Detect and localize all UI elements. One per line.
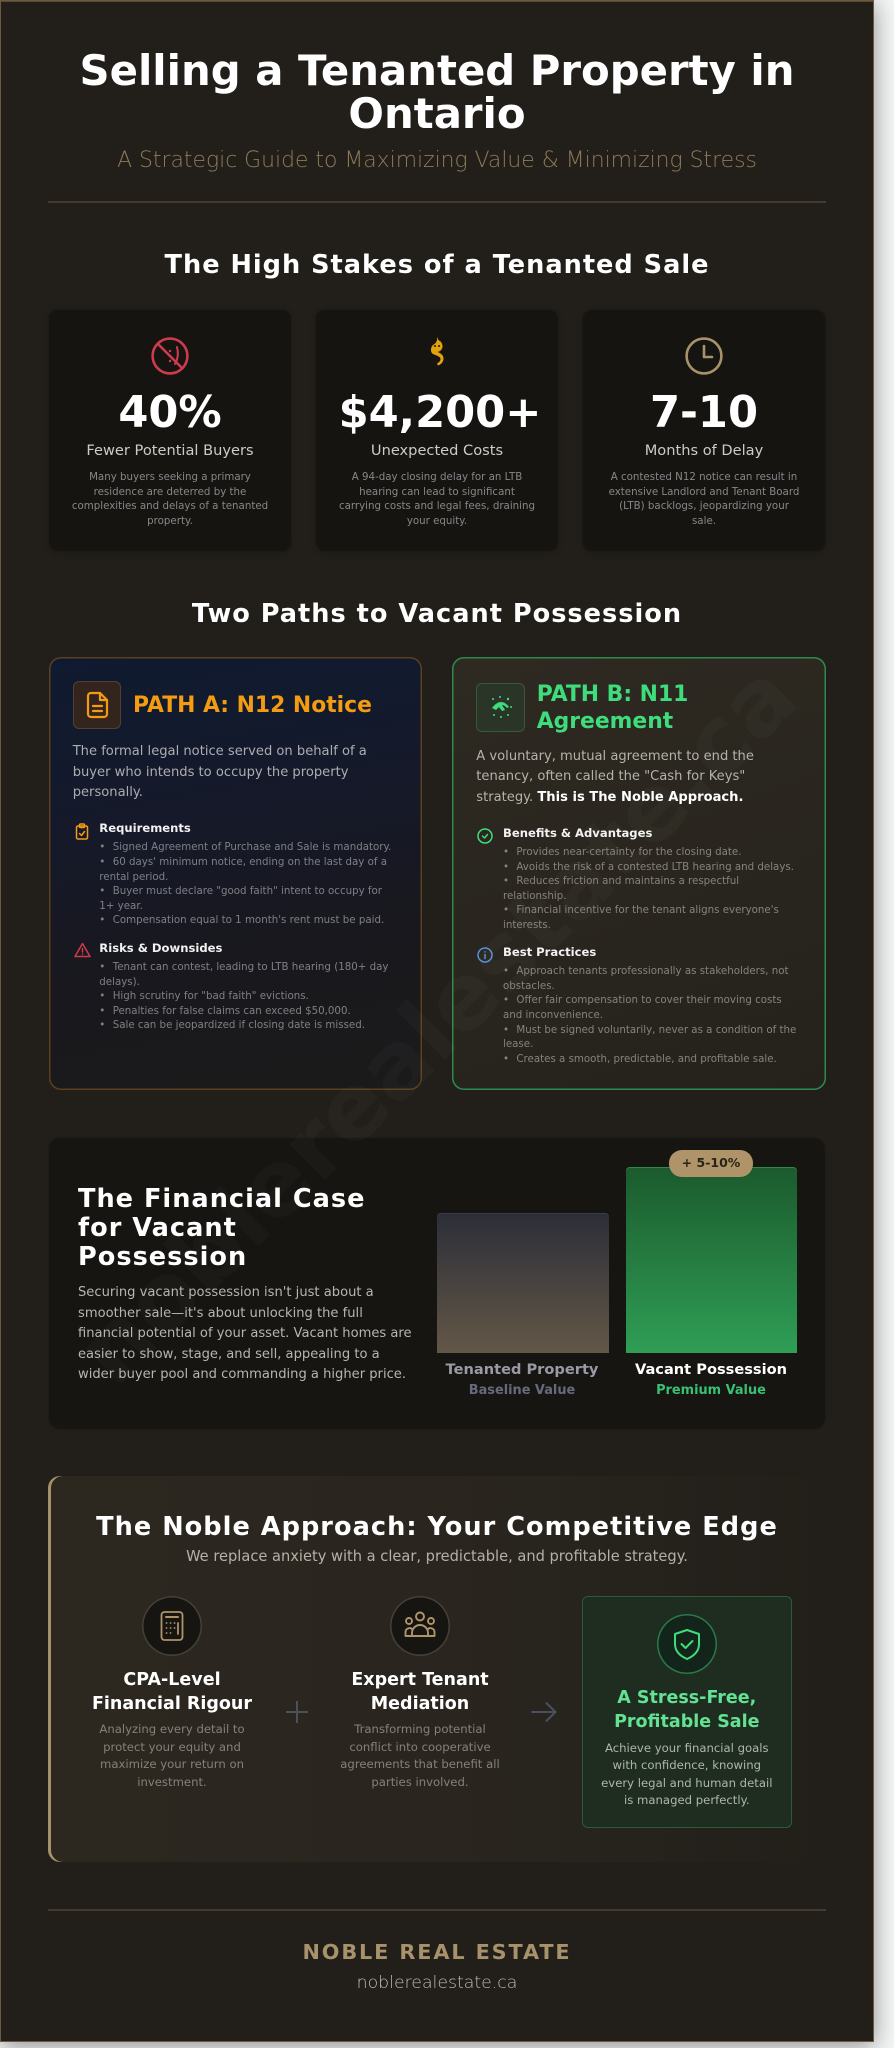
benefits list: relationship.: [503, 890, 567, 902]
stat description: carrying costs and legal fees, draining: [339, 500, 535, 512]
stat description: [72, 471, 268, 527]
noble heading: The Noble Approach: Your Competitive Edge: [96, 1512, 778, 1542]
noble subheading: We replace anxiety with a clear, predictable, and profitable strategy.: [186, 1548, 688, 1565]
financial heading: The Financial Case: [78, 1184, 365, 1214]
best practices list: Approach tenants professionally as stakeholders, not: [516, 965, 789, 977]
stat description: sale.: [692, 515, 716, 527]
best practices list: and inconvenience.: [503, 1009, 603, 1021]
risks list: delays).: [99, 976, 140, 988]
risks list: Sale can be jeopardized if closing date is missed.: [113, 1019, 365, 1031]
path A description: [72, 744, 367, 800]
financial heading: Possession: [78, 1242, 247, 1272]
requirements heading: Requirements: [99, 821, 191, 835]
benefits list: •: [503, 846, 509, 858]
column title: Expert Tenant: [351, 1670, 489, 1690]
stat description: [339, 471, 535, 527]
best practices list: •: [503, 1024, 509, 1036]
column description: [340, 1722, 500, 1789]
stat description: [609, 471, 799, 527]
benefits list: [503, 846, 794, 931]
stat description: extensive Landlord and Tenant Board: [609, 486, 799, 498]
stat label: Months of Delay: [645, 442, 763, 459]
icon: calculator: [142, 1596, 202, 1656]
callout description: [601, 1741, 772, 1807]
financial description: smoother sale—it's about unlocking the full: [78, 1306, 363, 1321]
requirements list: [99, 841, 391, 926]
callout description: every legal and human detail: [601, 1776, 772, 1790]
icon: info circle: [477, 947, 493, 963]
requirements list: 1+ year.: [99, 900, 143, 912]
path B description: A voluntary, mutual agreement to end the: [476, 748, 754, 764]
risks list: High scrutiny for "bad faith" evictions.: [113, 990, 309, 1002]
best practices list: •: [503, 965, 509, 977]
financial description: [78, 1285, 412, 1382]
column description: Analyzing every detail to: [99, 1722, 245, 1736]
title: Selling a Tenanted Property in: [80, 46, 794, 95]
best practices list: •: [503, 1053, 509, 1065]
best practices list: Must be signed voluntarily, never as a condition of the: [516, 1024, 796, 1036]
icon: people: [390, 1596, 450, 1656]
stat label: Unexpected Costs: [371, 442, 503, 459]
heading: two paths: Two Paths to Vacant Possession: [192, 599, 682, 629]
panel: stat fewer buyers: [48, 309, 292, 552]
column description: conflict into cooperative: [349, 1740, 491, 1754]
callout description: Achieve your financial goals: [605, 1741, 769, 1755]
column title: Financial Rigour: [92, 1694, 252, 1714]
financial description: financial potential of your asset. Vacant homes are: [78, 1326, 412, 1341]
financial description: wider buyer pool and commanding a higher price.: [78, 1367, 406, 1382]
title: Ontario: [348, 89, 526, 138]
icon: document: [73, 681, 121, 729]
path A title: PATH A: N12 Notice: [133, 693, 372, 718]
footer website: noblerealestate.ca: [357, 1973, 517, 1993]
path B description: tenancy, often called the "Cash for Keys": [476, 769, 745, 784]
column description: [99, 1722, 245, 1789]
path B title: Agreement: [537, 709, 673, 734]
best practices list: obstacles.: [503, 980, 555, 992]
stat value: 40%: [118, 388, 222, 438]
risks list: •: [99, 961, 105, 973]
icon: plus: [286, 1701, 308, 1723]
stat description: A 94-day closing delay for an LTB: [352, 471, 522, 483]
column description: agreements that benefit all: [340, 1757, 500, 1771]
column title: Mediation: [371, 1694, 469, 1714]
best practices heading: Best Practices: [503, 945, 596, 959]
column title: [351, 1670, 489, 1714]
panel: path B: [452, 657, 826, 1090]
panel: path A: [48, 657, 422, 1090]
column: financial rigour: [92, 1596, 252, 1789]
stat value: 7-10: [650, 388, 758, 438]
stat description: your equity.: [407, 515, 467, 527]
benefits list: •: [503, 861, 509, 873]
column description: protect your equity and: [103, 1740, 241, 1754]
icon: clock: [685, 337, 723, 375]
requirements list: rental period.: [99, 871, 168, 883]
column description: maximize your return on: [100, 1757, 244, 1771]
panel: stat unexpected costs: [315, 309, 559, 552]
icon: check circle: [477, 828, 493, 844]
stat description: hearing can lead to significant: [359, 486, 515, 498]
stat value: $4,200+: [339, 388, 541, 438]
callout title: [614, 1688, 759, 1732]
callout description: with confidence, knowing: [613, 1758, 761, 1772]
value: premium: Premium Value: [656, 1382, 766, 1398]
requirements list: Signed Agreement of Purchase and Sale is mandatory.: [113, 841, 391, 853]
best practices list: Offer fair compensation to cover their moving costs: [516, 994, 782, 1006]
badge: premium: + 5-10%: [682, 1155, 740, 1170]
value: baseline: Baseline Value: [469, 1382, 575, 1398]
icon: shield: [657, 1614, 717, 1674]
icon: arrow: [532, 1702, 557, 1722]
icon: no buyers: [151, 337, 189, 375]
callout: stress-free sale: [582, 1596, 792, 1828]
panel: financial case: [48, 1137, 826, 1430]
stat description: property.: [147, 515, 193, 527]
column title: [92, 1670, 252, 1714]
icon: warning: [74, 942, 91, 958]
icon: dollar: [431, 337, 444, 366]
financial description: easier to show, stage, and sell, appealing to a: [78, 1347, 380, 1362]
stat description: Many buyers seeking a primary: [89, 471, 251, 483]
stat description: residence are deterred by the: [94, 486, 246, 498]
path B description: [476, 748, 754, 804]
best practices list: lease.: [503, 1038, 533, 1050]
benefits list: •: [503, 904, 509, 916]
path A description: buyer who intends to occupy the property: [73, 765, 348, 780]
footer brand: NOBLE REAL ESTATE: [302, 1940, 572, 1964]
watermark: noblerealestate.ca: [56, 643, 818, 1405]
benefits list: •: [503, 875, 509, 887]
financial description: Securing vacant possession isn't just about a: [78, 1285, 374, 1300]
stat description: A contested N12 notice can result in: [611, 471, 797, 483]
column description: Transforming potential: [354, 1722, 486, 1736]
stat description: complexities and delays of a tenanted: [72, 500, 268, 512]
label: tenanted: Tenanted Property: [446, 1361, 598, 1378]
path B title: PATH B: N11: [537, 682, 688, 707]
risks list: Penalties for false claims can exceed $50,000.: [113, 1005, 351, 1017]
requirements list: •: [99, 856, 105, 868]
requirements list: 60 days' minimum notice, ending on the last day of a: [113, 856, 387, 868]
path B description: strategy. This is The Noble Approach.: [476, 790, 743, 804]
column title: CPA-Level: [123, 1670, 221, 1690]
callout description: is managed perfectly.: [624, 1793, 750, 1807]
path A description: personally.: [73, 785, 143, 800]
risks list: •: [99, 990, 105, 1002]
risks list: •: [99, 1005, 105, 1017]
benefits list: Avoids the risk of a contested LTB hearing and delays.: [516, 861, 794, 873]
best practices list: [503, 965, 796, 1065]
requirements list: •: [99, 841, 105, 853]
badge: premium: [669, 1150, 753, 1177]
label: vacant: Vacant Possession: [635, 1361, 787, 1378]
heading: high stakes: The High Stakes of a Tenanted Sale: [165, 250, 709, 280]
requirements list: •: [99, 885, 105, 897]
icon: handshake: [476, 683, 525, 732]
financial heading: [78, 1184, 365, 1272]
subtitle: A Strategic Guide to Maximizing Value & Minimizing Stress: [117, 148, 757, 173]
icon: clipboard: [76, 823, 88, 840]
callout title: Profitable Sale: [614, 1712, 759, 1732]
risks list: Tenant can contest, leading to LTB hearing (180+ day: [113, 961, 388, 973]
title: [80, 46, 794, 138]
best practices list: Creates a smooth, predictable, and profitable sale.: [516, 1053, 777, 1065]
risks list: •: [99, 1019, 105, 1031]
path B title: [536, 682, 688, 734]
stat description: (LTB) backlogs, jeopardizing your: [619, 500, 789, 512]
panel: stat months of delay: [582, 309, 826, 552]
column: tenant mediation: [340, 1596, 500, 1789]
bar: tenanted: [437, 1213, 608, 1353]
column description: investment.: [137, 1775, 207, 1789]
best practices list: •: [503, 994, 509, 1006]
bar: vacant: [626, 1167, 797, 1353]
financial heading: for Vacant: [78, 1213, 237, 1243]
panel: noble approach: [48, 1476, 826, 1862]
benefits list: Reduces friction and maintains a respectful: [516, 875, 739, 887]
stat label: Fewer Potential Buyers: [86, 442, 254, 459]
benefits heading: Benefits & Advantages: [503, 826, 652, 840]
benefits list: Provides near-certainty for the closing date.: [516, 846, 741, 858]
benefits list: interests.: [503, 919, 551, 931]
risks heading: Risks & Downsides: [99, 941, 222, 955]
risks list: [99, 961, 388, 1031]
column description: parties involved.: [371, 1775, 469, 1789]
requirements list: Buyer must declare "good faith" intent to occupy for: [113, 885, 382, 897]
callout title: A Stress-Free,: [617, 1688, 756, 1708]
requirements list: Compensation equal to 1 month's rent must be paid.: [113, 914, 384, 926]
requirements list: •: [99, 914, 105, 926]
benefits list: Financial incentive for the tenant aligns everyone's: [516, 904, 779, 916]
path A description: The formal legal notice served on behalf of a: [73, 744, 367, 759]
